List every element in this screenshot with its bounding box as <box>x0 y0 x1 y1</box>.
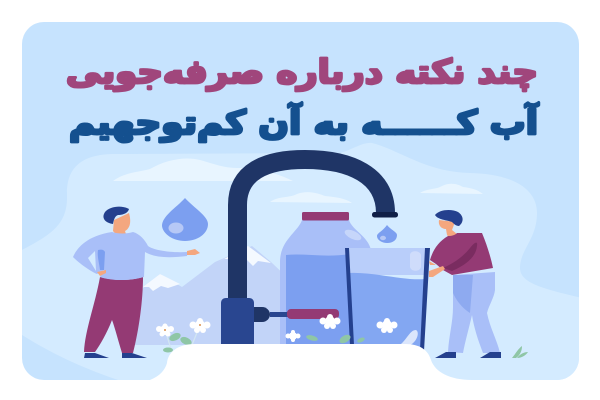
faucet base <box>221 298 254 345</box>
glass of water <box>286 248 430 351</box>
title line 1: چند نکته درباره صرفه‌جویی <box>66 52 538 92</box>
title line 2: آب کــــــه به آن کم‌توجهیم <box>69 102 539 143</box>
leaves in glass <box>306 333 365 345</box>
neck and face <box>113 213 130 235</box>
glass upper empty part <box>347 248 428 275</box>
shoes <box>84 353 147 358</box>
flower in glass <box>286 314 398 342</box>
bottle cap <box>302 212 349 220</box>
icon: large water drop <box>162 198 208 241</box>
trouser shade <box>453 275 473 313</box>
gap under arm <box>88 251 96 271</box>
valve rod <box>270 312 290 317</box>
glass highlights <box>410 251 421 271</box>
trousers <box>84 277 143 353</box>
mountains <box>120 246 290 345</box>
face and neck <box>439 220 457 237</box>
hands <box>429 261 445 277</box>
stone in glass <box>400 330 418 345</box>
sweater <box>73 232 187 280</box>
glass rim edges <box>345 248 430 351</box>
icon: grass <box>512 346 528 358</box>
trousers <box>448 272 500 353</box>
bottle highlight <box>343 228 363 242</box>
bottle body <box>280 220 371 345</box>
hands <box>97 249 200 276</box>
flowers and leaves <box>156 318 387 352</box>
shoes <box>435 352 501 358</box>
white bottom shape <box>150 344 600 400</box>
bottle <box>280 212 371 345</box>
sweater arm shade <box>443 243 477 271</box>
faucet base and valve <box>221 298 339 345</box>
faucet <box>238 160 398 300</box>
bottle water <box>286 254 352 345</box>
hair <box>103 207 129 224</box>
arm shadow <box>98 250 105 270</box>
icon: small water drop <box>377 225 397 243</box>
figure: man on the left <box>73 207 200 358</box>
title <box>66 52 539 143</box>
valve handle <box>287 309 339 319</box>
clouds <box>113 158 483 203</box>
faucet nozzle <box>372 212 398 218</box>
valve knob <box>254 307 270 322</box>
hair <box>435 210 463 226</box>
figure: man on the right <box>429 210 501 358</box>
faucet pipe <box>238 160 386 300</box>
sweater <box>430 233 493 275</box>
glass water <box>350 273 425 350</box>
